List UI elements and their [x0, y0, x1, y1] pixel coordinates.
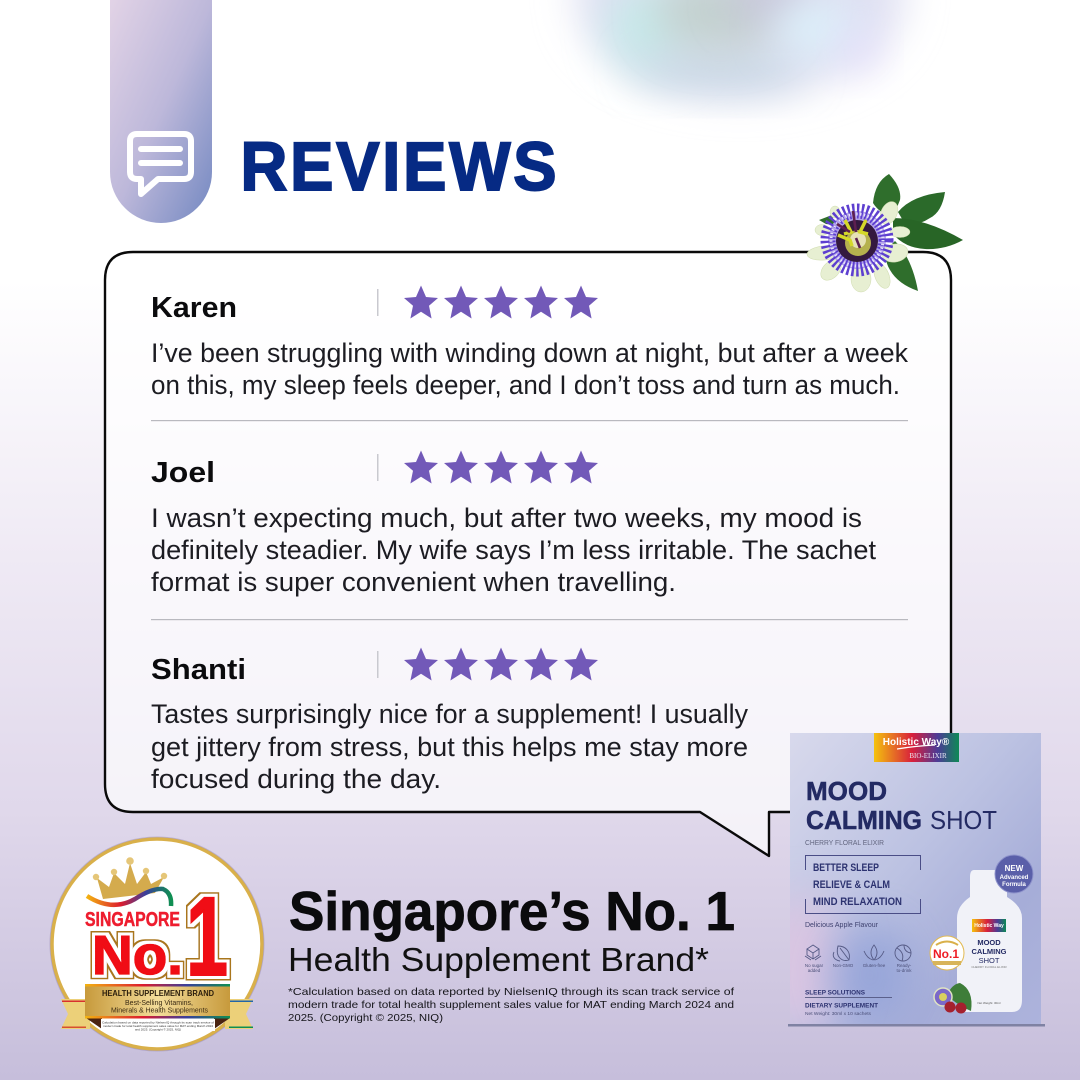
sachet: CHERRY FLORAL ELIXIR: [971, 965, 1007, 969]
product name: MOOD: [806, 776, 887, 806]
footnote: [288, 986, 734, 1024]
review text: [151, 503, 877, 597]
feature icons: No sugar: [805, 963, 824, 968]
product box: [788, 733, 1045, 1026]
product box: CHERRY FLORAL ELIXIR: [805, 838, 884, 847]
feature icons: Non-GMO: [833, 963, 854, 968]
star rating: [404, 286, 598, 318]
ribbon: [61, 984, 253, 1032]
header tab with speech bubble icon: [110, 0, 212, 223]
crown: [87, 857, 171, 906]
badge: Singapore No. 1: 1: [186, 874, 228, 999]
new formula badge: Formula: [1002, 882, 1026, 888]
sachet: MOOD: [977, 938, 1001, 947]
divider: [377, 454, 378, 481]
badge: Singapore No. 1: No.: [92, 924, 183, 986]
flower and cherries: [934, 983, 972, 1014]
ribbon: HEALTH SUPPLEMENT BRAND: [102, 989, 214, 998]
icon: speech bubble: [130, 134, 191, 194]
review text: get jittery from stress, but this helps me stay more: [151, 732, 748, 762]
feature icons: [805, 945, 912, 973]
review text: [151, 338, 909, 400]
benefits list: [806, 856, 920, 914]
brand logo: BIO-ELIXIR: [909, 752, 947, 760]
review text: on this, my sleep feels deeper, and I don’t toss and turn as much.: [151, 370, 900, 400]
badge: Singapore No. 1: [50, 837, 264, 1051]
review text: I’ve been struggling with winding down at night, but after a week: [151, 338, 909, 368]
review text: Tastes surprisingly nice for a supplement! I usually: [151, 699, 749, 729]
star rating: [404, 450, 598, 484]
category labels: DIETARY SUPPLEMENT: [805, 1002, 878, 1010]
product name: [806, 776, 997, 835]
product name: SHOT: [930, 805, 997, 835]
new formula badge: NEW: [1005, 864, 1024, 873]
footnote: 2025. (Copyright © 2025, NIQ): [288, 1012, 443, 1024]
reviewer name: Shanti: [151, 654, 246, 686]
sachet: Holistic Way: [974, 923, 1004, 929]
ribbon: and 2025. (Copyright © 2025, NIQ): [135, 1028, 181, 1032]
category labels: Net Weight: 30ml x 10 sachets: [805, 1011, 872, 1016]
sachet: Net Weight: 30ml: [978, 1001, 1001, 1005]
review text: focused during the day.: [151, 764, 441, 794]
footnote: *Calculation based on data reported by NielsenIQ through its scan track service of: [288, 986, 734, 998]
brand claim heading: Singapore’s No. 1: [289, 880, 735, 942]
sachet: [957, 870, 1022, 1012]
category labels: [805, 990, 892, 1016]
product name: CALMING: [806, 805, 922, 835]
mini No.1 badge: No.1: [933, 947, 959, 961]
new formula badge: [995, 855, 1033, 893]
review text: [151, 699, 749, 794]
sachet: CALMING: [972, 947, 1007, 956]
panel: review speech bubble: [105, 252, 951, 856]
benefits list: BETTER SLEEP: [813, 862, 879, 874]
review text: definitely steadier. My wife says I’m less irritable. The sachet: [151, 535, 877, 565]
review: Joel: [151, 450, 877, 597]
feature icons: Ready-: [897, 963, 912, 968]
brand claim subheading: Health Supplement Brand*: [288, 941, 709, 978]
benefits list: RELIEVE & CALM: [813, 879, 890, 891]
icon: passion flower: [806, 174, 963, 292]
reviewer name: Karen: [151, 292, 237, 324]
ribbon: Best-Selling Vitamins,: [125, 998, 193, 1007]
mini No.1 badge: [930, 936, 964, 970]
new formula badge: Advanced: [1000, 875, 1029, 881]
title: REVIEWS: [240, 128, 559, 205]
ribbon: Calculation based on data reported by NielsenIQ through its scan track service of: [102, 1020, 214, 1024]
ribbon: modern trade for total health supplement sales value for MAT ending March 2024: [103, 1024, 213, 1028]
star rating: [404, 648, 598, 680]
divider: [377, 651, 378, 678]
reviewer name: Joel: [151, 457, 215, 489]
product box: Delicious Apple Flavour: [805, 920, 879, 929]
badge: Singapore No. 1: SINGAPORE: [85, 909, 180, 931]
footnote: modern trade for total health supplement sales value for MAT ending March 2024 and: [288, 999, 734, 1011]
review: Karen: [151, 286, 909, 400]
feature icons: Gluten-free: [863, 963, 886, 968]
review text: I wasn’t expecting much, but after two weeks, my mood is: [151, 503, 862, 533]
ribbon: Minerals & Health Supplements: [111, 1006, 208, 1014]
category labels: SLEEP SOLUTIONS: [805, 990, 866, 996]
review: Shanti: [151, 648, 749, 794]
feature icons: to-drink: [896, 968, 912, 973]
benefits list: MIND RELAXATION: [813, 896, 902, 908]
feature icons: added: [808, 968, 821, 973]
decorative iridescent blob: [575, 0, 905, 95]
sachet: SHOT: [979, 956, 1000, 965]
brand logo: Holistic Way®: [883, 737, 950, 748]
divider: [377, 289, 378, 316]
review text: format is super convenient when travelling.: [151, 567, 676, 597]
brand logo: [874, 733, 959, 762]
